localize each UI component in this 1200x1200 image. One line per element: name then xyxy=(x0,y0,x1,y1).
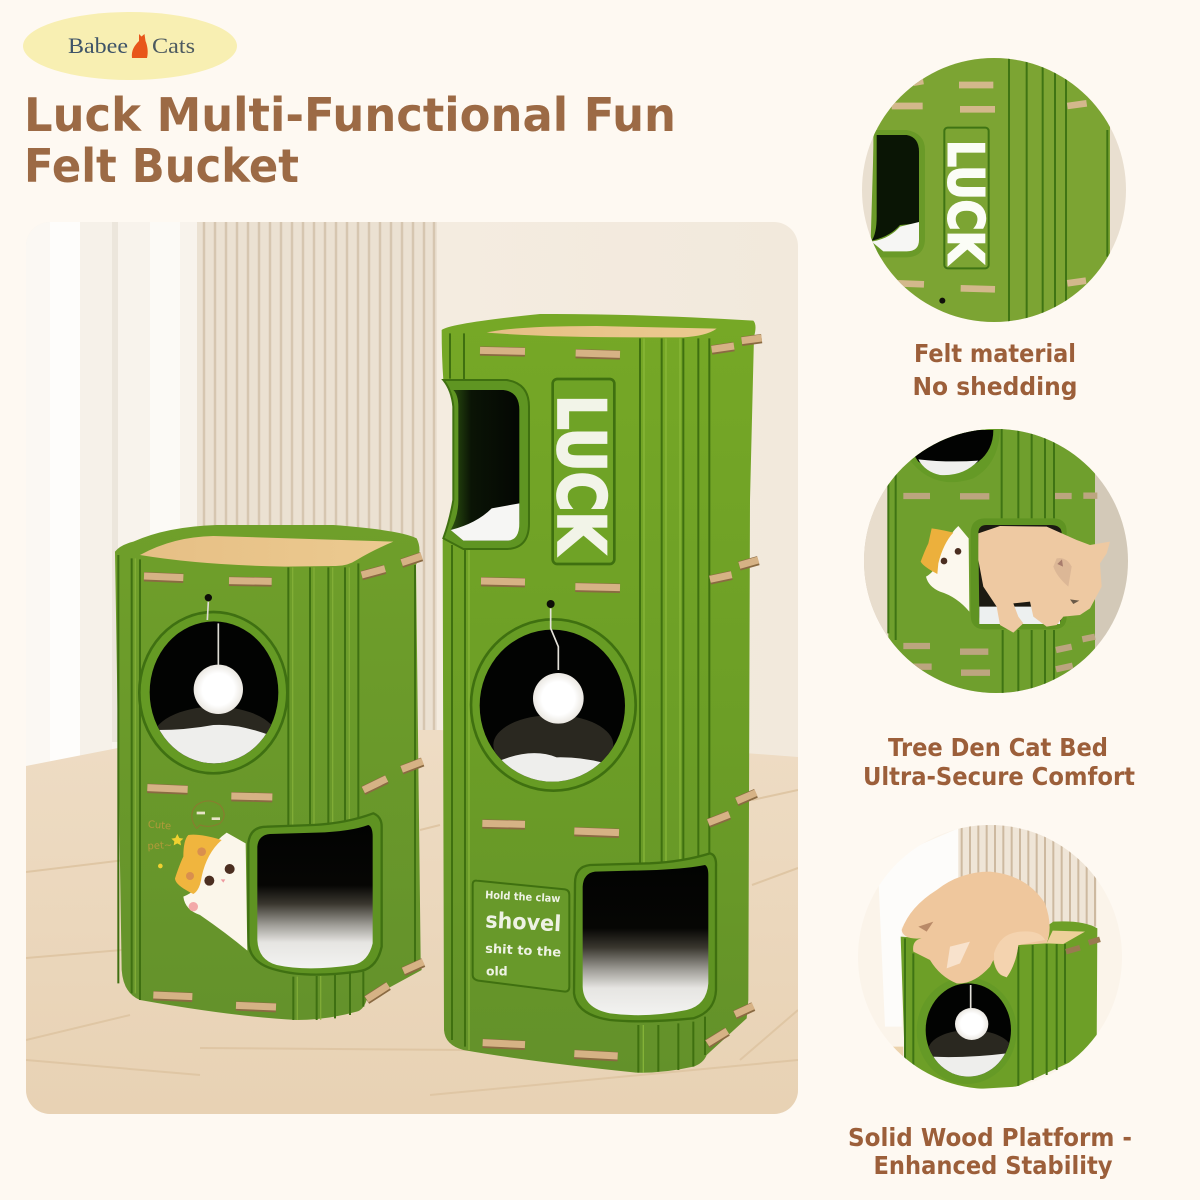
shovel label: shovel xyxy=(485,908,562,937)
curtain xyxy=(878,828,958,1027)
callout circle: felt material xyxy=(862,58,1126,322)
square opening xyxy=(971,518,1067,629)
callout circle: wood platform xyxy=(850,820,1140,1100)
logo text right: Cats xyxy=(152,33,195,58)
caption: wood platform xyxy=(848,1123,1132,1180)
LUCK label: LUCK xyxy=(937,140,995,265)
cat sticker xyxy=(921,526,969,612)
cat xyxy=(902,872,1050,983)
floor xyxy=(883,1047,903,1073)
callout circle: cat bed xyxy=(864,429,1128,693)
small bucket round hole xyxy=(139,612,287,773)
tall bucket hanging ball xyxy=(533,600,584,724)
caption: felt material xyxy=(912,339,1078,401)
small bucket ribs xyxy=(118,555,415,1020)
small bucket xyxy=(115,525,423,1020)
tall bucket round hole xyxy=(471,619,636,791)
circle backdrop xyxy=(850,820,1140,1100)
felt surface xyxy=(873,50,1110,330)
cat sticker xyxy=(175,833,247,951)
caption: felt material: Felt material xyxy=(914,339,1076,368)
caption: cat bed xyxy=(863,733,1135,791)
pegs xyxy=(1066,939,1100,952)
LUCK label: LUCK xyxy=(543,395,619,555)
tall bucket upper opening xyxy=(443,380,529,549)
shovel label: old xyxy=(486,964,508,979)
sticker doodles: Cute xyxy=(147,819,172,832)
shovel label xyxy=(473,881,569,992)
wood top xyxy=(1047,931,1085,944)
title: Felt Bucket xyxy=(24,139,299,193)
title: Luck Multi-Functional Fun xyxy=(24,88,676,142)
slats xyxy=(864,486,888,637)
caption: cat bed: Ultra-Secure Comfort xyxy=(863,762,1135,791)
small bucket wood top xyxy=(140,536,393,567)
caption: cat bed: Tree Den Cat Bed xyxy=(888,733,1108,762)
cord hole xyxy=(939,298,945,304)
small bucket pegs xyxy=(144,556,423,1008)
hanging ball xyxy=(955,985,988,1040)
main photo panel xyxy=(26,222,798,1114)
circle backdrop xyxy=(862,58,1126,320)
bucket ribs xyxy=(905,938,1065,1087)
caption: felt material: No shedding xyxy=(912,372,1078,401)
tall bucket pegs xyxy=(480,338,762,1057)
caption: wood platform: Enhanced Stability xyxy=(874,1151,1113,1180)
tall bucket wood top xyxy=(487,326,717,337)
upper round hole xyxy=(908,427,1000,482)
bucket xyxy=(901,921,1097,1090)
title xyxy=(24,88,676,193)
upper opening xyxy=(871,130,925,257)
pegs xyxy=(892,81,1087,289)
small bucket hanging ball xyxy=(194,594,243,714)
felt ribs xyxy=(888,427,1054,693)
pegs xyxy=(903,496,1097,673)
cat xyxy=(978,526,1110,633)
tall bucket body xyxy=(442,314,756,1073)
tall bucket square hole xyxy=(574,853,716,1021)
small bucket body xyxy=(115,525,422,1020)
sticker doodles xyxy=(147,801,224,868)
slatted panel xyxy=(197,222,437,732)
logo cat icon xyxy=(132,34,148,58)
sticker doodles: pet~ xyxy=(147,840,173,852)
felt ribs xyxy=(1009,57,1107,323)
small bucket square hole xyxy=(248,813,382,975)
tall bucket ribs xyxy=(450,333,709,1073)
felt surface xyxy=(888,420,1095,700)
floor xyxy=(26,730,798,1114)
LUCK label xyxy=(943,126,990,270)
room wall xyxy=(437,222,798,757)
curtain xyxy=(26,222,204,767)
tall bucket xyxy=(442,314,762,1073)
circle backdrop xyxy=(864,429,1128,693)
shovel label: Hold the claw xyxy=(485,888,561,905)
round hole xyxy=(917,977,1017,1084)
logo text left: Babee xyxy=(68,33,128,58)
shovel label: shit to the xyxy=(485,941,562,960)
logo xyxy=(23,12,237,80)
caption: wood platform: Solid Wood Platform - xyxy=(848,1123,1132,1152)
slats xyxy=(958,825,1097,927)
